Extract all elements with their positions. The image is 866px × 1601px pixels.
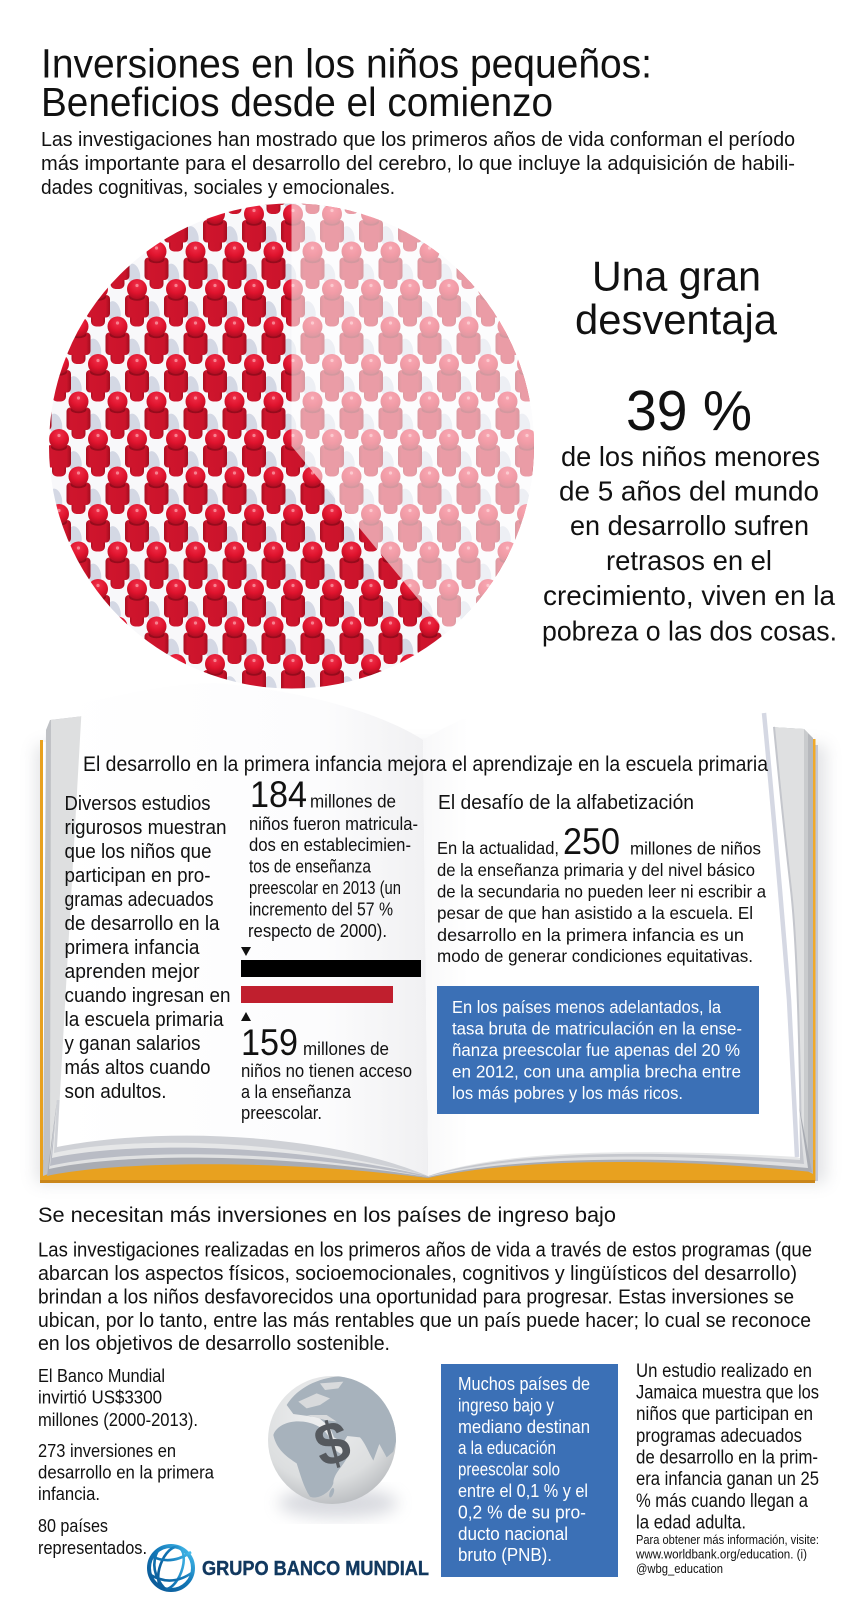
stat: 159 millones sin acceso <box>241 1022 412 1123</box>
source note: @wbg_education <box>636 1561 723 1576</box>
world bank figures: millones (2000-2013). <box>38 1409 198 1430</box>
statistic description: en desarrollo sufren <box>570 510 809 541</box>
stat: 159 millones sin acceso: preescolar. <box>241 1102 322 1123</box>
left column text <box>64 793 230 1103</box>
left column text: más altos cuando <box>64 1057 210 1079</box>
logo: grupo banco mundial <box>149 1544 429 1592</box>
statistic description: pobreza o las dos cosas. <box>542 616 837 646</box>
section paragraph: brindan a los niños desfavorecidos una oportunidad para progresar. Estas inversiones se <box>38 1286 794 1308</box>
statistic description: crecimiento, viven en la <box>543 580 835 611</box>
stat: 184 millones matriculados: 184 <box>250 774 307 815</box>
stat: 184 millones matriculados <box>248 774 418 941</box>
literacy text: millones de niños <box>630 838 761 858</box>
callout: ingreso bajo y mediano: preescolar solo <box>458 1460 560 1480</box>
left column text: cuando ingresan en <box>64 985 230 1007</box>
stat: 184 millones matriculados: dos en establecimien- <box>249 834 411 855</box>
left column text: de desarrollo en la <box>64 913 220 935</box>
intro text: dades cognitivas, sociales y emocionales. <box>41 177 395 199</box>
callout: países menos adelantados: en 2012, con una amplia brecha entre <box>452 1062 741 1082</box>
world bank figures: desarrollo en la primera <box>38 1462 215 1482</box>
pie chart of people: 39 % highlighted <box>49 204 534 688</box>
statistic description <box>542 441 837 646</box>
callout: países menos adelantados: En los países menos adelantados, la <box>452 997 721 1017</box>
world bank figures: El Banco Mundial <box>38 1365 165 1386</box>
title <box>41 40 652 125</box>
heading: una gran desventaja: Una gran <box>592 252 761 300</box>
stat: 184 millones matriculados: millones de <box>310 790 396 812</box>
left column text: que los niños que <box>64 841 212 863</box>
jamaica study text: niños que participan en <box>636 1404 813 1425</box>
section heading: Se necesitan más inversiones en los países de ingreso bajo <box>38 1203 616 1227</box>
source note: Para obtener más información, visite: <box>636 1532 819 1547</box>
jamaica study text: % más cuando llegan a <box>636 1491 808 1512</box>
title: Inversiones en los niños pequeños: <box>41 40 652 86</box>
bar chart: matriculados vs sin acceso <box>241 947 421 1021</box>
logo: grupo banco mundial: GRUPO BANCO MUNDIAL <box>202 1558 429 1580</box>
right page edge bands <box>428 1100 812 1178</box>
callout: ingreso bajo y mediano <box>441 1364 618 1577</box>
jamaica study text: programas adecuados <box>636 1426 802 1447</box>
world bank figures: 80 países <box>38 1515 108 1536</box>
callout: países menos adelantados: los más pobres y los más ricos. <box>452 1083 683 1103</box>
stat: 159 millones sin acceso: millones de <box>303 1038 389 1059</box>
book heading: El desarrollo en la primera infancia mejora el aprendizaje en la escuela primaria <box>83 753 768 776</box>
callout: ingreso bajo y mediano: ducto nacional <box>458 1524 568 1544</box>
callout: ingreso bajo y mediano: ingreso bajo y <box>458 1396 554 1416</box>
left column text: son adultos. <box>64 1081 166 1103</box>
left column text: Diversos estudios <box>64 793 210 815</box>
left column text: aprenden mejor <box>64 961 200 983</box>
world bank figures <box>38 1365 215 1558</box>
callout: ingreso bajo y mediano: a la educación <box>458 1438 556 1458</box>
literacy text: En la actualidad, <box>437 838 559 858</box>
stat: 184 millones matriculados: incremento del 57 % <box>249 898 393 920</box>
world bank figures: infancia. <box>38 1483 100 1504</box>
left column text: gramas adecuados <box>64 889 214 911</box>
heading: una gran desventaja <box>575 252 778 343</box>
statistic description: de 5 años del mundo <box>559 476 819 506</box>
literacy text: desarrollo en la primera infancia es un <box>437 925 744 945</box>
literacy text: de la secundaria no pueden leer ni escribir a <box>437 882 766 902</box>
source note: www.worldbank.org/education. (i) <box>635 1546 807 1562</box>
pale wedge: remaining share <box>292 204 534 633</box>
stat: 159 millones sin acceso: a la enseñanza <box>241 1081 352 1102</box>
left column text: la escuela primaria <box>64 1009 224 1031</box>
intro text <box>41 129 795 199</box>
stat: 184 millones matriculados: tos de enseñanza <box>249 856 372 876</box>
stat: 184 millones matriculados: preescolar en 2013 (un <box>249 877 401 898</box>
callout: países menos adelantados: tasa bruta de matriculación en la ense- <box>452 1018 742 1038</box>
literacy text: modo de generar condiciones equitativas. <box>437 946 753 966</box>
icon: globe with dollar sign <box>268 1376 398 1518</box>
jamaica study text: era infancia ganan un 25 <box>636 1469 819 1490</box>
jamaica study text: Jamaica muestra que los <box>636 1382 819 1404</box>
bar: 159 millones <box>241 986 393 1003</box>
left column text: rigurosos muestran <box>64 817 226 839</box>
world bank figures: representados. <box>38 1537 147 1558</box>
intro text: Las investigaciones han mostrado que los primeros años de vida conforman el período <box>41 129 795 151</box>
statistic description: de los niños menores <box>561 441 820 472</box>
stat: 159 millones sin acceso: 159 <box>241 1022 298 1063</box>
world bank figures: invirtió US$3300 <box>38 1386 162 1408</box>
open book illustration <box>36 683 826 1183</box>
intro text: más importante para el desarrollo del cerebro, lo que incluye la adquisición de habili- <box>41 153 795 175</box>
world bank figures: 273 inversiones en <box>38 1440 176 1461</box>
left page <box>57 683 428 1176</box>
right page <box>423 686 798 1176</box>
title: Beneficios desde el comienzo <box>41 79 553 125</box>
callout: ingreso bajo y mediano: Muchos países de <box>458 1374 590 1394</box>
jamaica study text: Un estudio realizado en <box>636 1361 812 1382</box>
callout: ingreso bajo y mediano: mediano destinan <box>458 1417 590 1437</box>
left column text: participan en pro- <box>64 865 210 887</box>
literacy text <box>437 821 766 966</box>
heading: una gran desventaja: desventaja <box>575 296 778 343</box>
icon: world bank globe <box>149 1544 193 1592</box>
section paragraph: ubican, por lo tanto, entre las más rentables que un país puede hacer; lo cual se reconoce <box>38 1309 811 1332</box>
left page edge bands <box>47 1100 428 1178</box>
section paragraph: en los objetivos de desarrollo sostenible. <box>38 1332 390 1355</box>
stat: 184 millones matriculados: niños fueron matricula- <box>249 813 418 834</box>
section paragraph: abarcan los aspectos físicos, socioemocionales, cognitivos y lingüísticos del desarrollo) <box>38 1262 797 1285</box>
left column text: primera infancia <box>64 937 200 959</box>
callout: países menos adelantados: ñanza preescolar fue apenas del 20 % <box>452 1040 740 1060</box>
callout: países menos adelantados <box>437 986 759 1114</box>
bar: 184 millones <box>241 960 421 977</box>
literacy text: pesar de que han asistido a la escuela. El <box>437 903 753 923</box>
callout: ingreso bajo y mediano: entre el 0,1 % y el <box>458 1481 588 1501</box>
marker: down triangle <box>241 947 251 956</box>
jamaica study text <box>636 1361 819 1534</box>
jamaica study text: la edad adulta. <box>636 1512 746 1534</box>
literacy text: 250 <box>563 821 620 862</box>
statistic description: retrasos en el <box>606 545 772 576</box>
marker: up triangle <box>241 1012 251 1021</box>
literacy text: de la enseñanza primaria y del nivel básico <box>437 860 755 880</box>
stat: 159 millones sin acceso: niños no tienen acceso <box>241 1060 412 1081</box>
stat: 184 millones matriculados: respecto de 2000). <box>248 920 387 941</box>
jamaica study text: de desarrollo en la prim- <box>636 1448 818 1468</box>
callout: ingreso bajo y mediano: bruto (PNB). <box>458 1545 552 1565</box>
left column text: y ganan salarios <box>64 1033 200 1055</box>
callout: ingreso bajo y mediano: 0,2 % de su pro- <box>458 1502 586 1522</box>
statistic: 39 %: 39 % <box>626 379 752 443</box>
section paragraph <box>38 1238 812 1355</box>
icon: globe with dollar sign: $ <box>307 1407 357 1480</box>
heading: el desafío de la alfabetización: El desafío de la alfabetización <box>438 792 694 814</box>
source note <box>635 1532 819 1576</box>
